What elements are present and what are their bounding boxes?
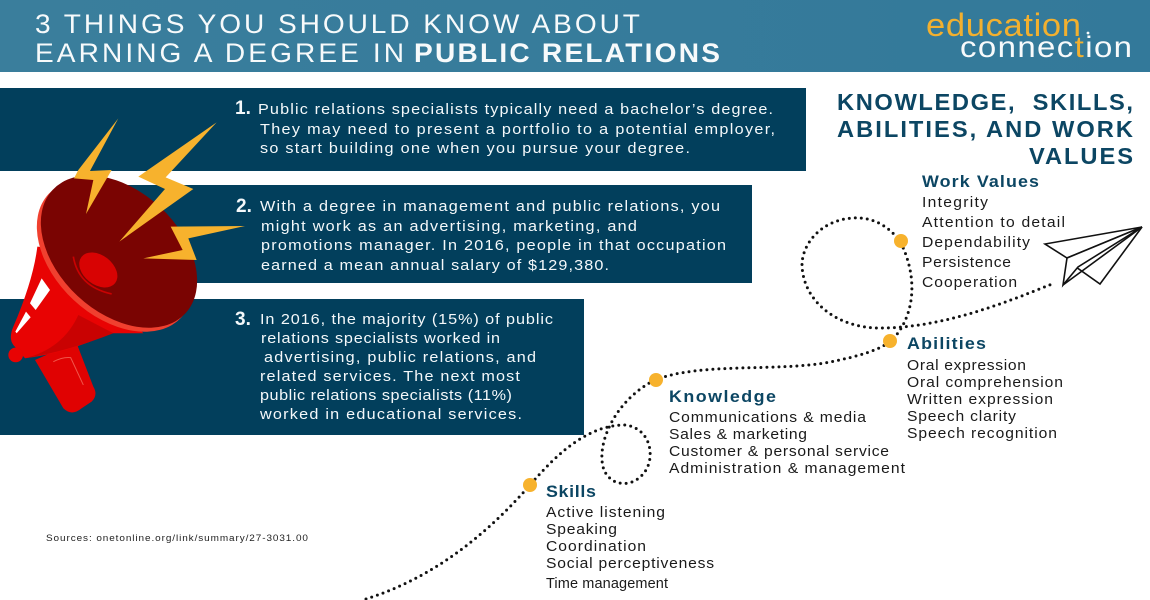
list: skills: Social perceptiveness — [546, 556, 714, 572]
heading: knowledge, skills, abilities, and work values: VALUES — [1029, 143, 1133, 169]
list: abilities: Abilities — [907, 333, 986, 353]
logo: education connection: education — [926, 8, 1081, 44]
list: abilities: Speech clarity — [907, 409, 1016, 425]
panel 1 — [0, 88, 806, 171]
milestone dots — [523, 234, 908, 492]
icon: paper airplane — [1045, 227, 1142, 285]
panel 2: promotions manager. In 2016, people in that occupation — [261, 238, 726, 254]
list: knowledge: Knowledge — [669, 386, 776, 406]
list: skills: Active listening — [546, 505, 665, 521]
panel 3: 3. — [235, 309, 251, 330]
panel 2: might work as an advertising, marketing, and — [261, 219, 637, 235]
panel 1: 1. — [235, 98, 251, 119]
logo: education connection: connection — [960, 29, 1132, 64]
icon: megaphone with lightning bolts — [7, 118, 245, 412]
list: work values — [922, 171, 1065, 291]
list: work values: Work Values — [922, 171, 1039, 191]
list: work values: Persistence — [922, 255, 1011, 271]
title: 3 THINGS YOU SHOULD KNOW ABOUT — [35, 8, 640, 39]
list: skills: Coordination — [546, 539, 646, 555]
list: work values: Attention to detail — [922, 215, 1065, 231]
title: EARNING A DEGREE IN — [35, 37, 404, 68]
list: skills: Time management — [546, 576, 668, 592]
panel 1: They may need to present a portfolio to a potential employer, — [260, 122, 775, 138]
title: PUBLIC RELATIONS — [414, 37, 720, 68]
heading: knowledge, skills, abilities, and work values: ABILITIES, AND WORK — [837, 116, 1133, 142]
panel 3: In 2016, the majority (15%) of public — [260, 312, 553, 328]
list: skills: Skills — [546, 481, 596, 501]
panel 2 — [128, 185, 752, 283]
list: knowledge: Administration & management — [669, 461, 906, 477]
list: abilities: Written expression — [907, 392, 1053, 408]
panel 3: public relations specialists (11%) — [260, 388, 512, 404]
panel 2: 2. — [236, 196, 252, 217]
panel 1: Public relations specialists typically need a bachelor’s degree. — [258, 102, 773, 118]
list: skills — [546, 481, 714, 592]
heading: knowledge, skills, abilities, and work values: KNOWLEDGE, SKILLS, — [837, 89, 1133, 115]
title — [35, 8, 720, 68]
list: abilities: Oral comprehension — [907, 375, 1063, 391]
list: abilities — [907, 333, 1063, 442]
list: skills: Speaking — [546, 522, 617, 538]
list: work values: Dependability — [922, 235, 1030, 251]
list: work values: Integrity — [922, 195, 988, 211]
logo: education connection — [926, 8, 1132, 64]
list: knowledge: Sales & marketing — [669, 427, 807, 443]
list: abilities: Oral expression — [907, 358, 1026, 374]
list: knowledge — [669, 386, 906, 477]
sources note: Sources: onetonline.org/link/summary/27-3031.00 — [46, 533, 309, 544]
list: knowledge: Customer & personal service — [669, 444, 889, 460]
panel 1: so start building one when you pursue your degree. — [260, 141, 690, 157]
panel 2: earned a mean annual salary of $129,380. — [261, 258, 609, 274]
panel 3: worked in educational services. — [259, 407, 522, 423]
list: abilities: Speech recognition — [907, 426, 1057, 442]
list: knowledge: Communications & media — [669, 410, 867, 426]
header band — [0, 0, 1150, 72]
dotted flight path — [366, 218, 1052, 599]
panel 3: related services. The next most — [260, 369, 521, 385]
heading: knowledge, skills, abilities, and work values — [837, 89, 1133, 169]
panel 3: advertising, public relations, and — [264, 350, 536, 366]
panel 3 — [0, 299, 584, 435]
list: work values: Cooperation — [922, 275, 1017, 291]
panel 3: relations specialists worked in — [261, 331, 500, 347]
panel 2: With a degree in management and public relations, you — [260, 199, 720, 215]
